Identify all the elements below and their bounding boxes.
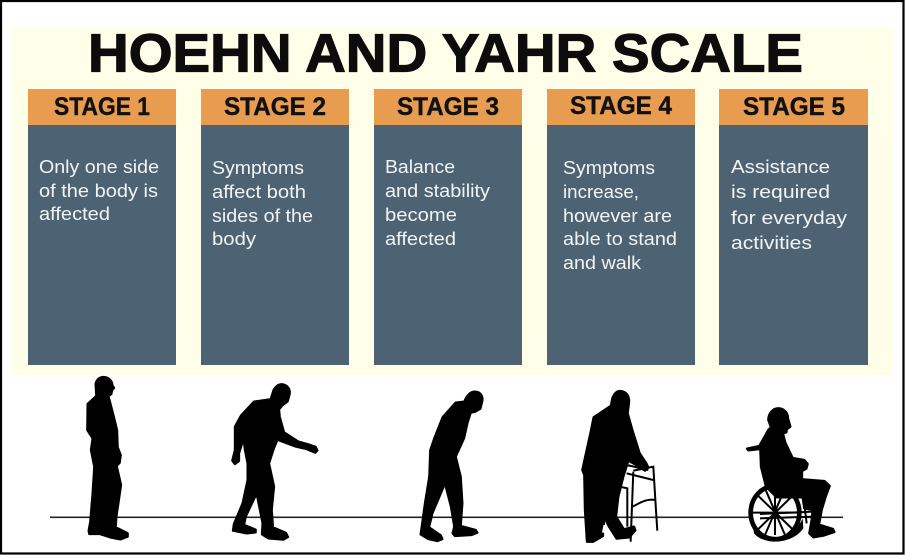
- panel: stage 3: affected: [385, 228, 456, 249]
- panel: stage 1: Only one side: [39, 156, 159, 177]
- panel: stage 4: and walk: [563, 252, 642, 273]
- panel: stage 3: [374, 89, 522, 365]
- panel: stage 5: activities: [731, 232, 812, 253]
- icon: standing person: [87, 377, 128, 539]
- panel: stage 5: STAGE 5: [743, 93, 845, 121]
- panel: stage 4: increase,: [563, 181, 639, 202]
- panel: stage 1: of the body is: [39, 180, 158, 201]
- panel: stage 1: STAGE 1: [54, 93, 150, 121]
- title: HOEHN AND YAHR SCALE: [88, 24, 803, 84]
- icon: person in wheelchair: [747, 408, 834, 542]
- panel: stage 5: Assistance: [731, 156, 830, 177]
- panel: stage 5: [719, 89, 868, 365]
- panel: stage 2: affect both: [212, 181, 306, 202]
- icon: person bent forward: [421, 392, 482, 541]
- panel: stage 3: STAGE 3: [397, 93, 499, 121]
- panel: stage 1: [28, 89, 176, 365]
- panel: stage 2: body: [212, 228, 257, 249]
- panel: stage 2: [201, 89, 349, 365]
- icon: person with walker: [582, 391, 657, 542]
- panel: stage 2: sides of the: [212, 205, 313, 226]
- panel: stage 2: Symptoms: [212, 157, 304, 178]
- panel: stage 1: affected: [39, 203, 110, 224]
- panel: stage 2: STAGE 2: [224, 93, 326, 121]
- panel: stage 5: is required: [731, 181, 830, 202]
- panel: stage 5: for everyday: [731, 207, 848, 228]
- ground line: [50, 516, 843, 518]
- panel: stage 4: [547, 89, 695, 365]
- panel: stage 4: STAGE 4: [570, 92, 672, 120]
- panel: stage 3: become: [385, 204, 457, 225]
- panel: stage 3: and stability: [385, 180, 491, 201]
- panel: stage 4: able to stand: [563, 228, 677, 249]
- panel: stage 3: Balance: [385, 156, 455, 177]
- icon: person stooping with arm out: [232, 384, 317, 540]
- panel: stage 4: Symptoms: [563, 157, 655, 178]
- cream background panel: [12, 27, 893, 375]
- panel: stage 4: however are: [563, 205, 672, 226]
